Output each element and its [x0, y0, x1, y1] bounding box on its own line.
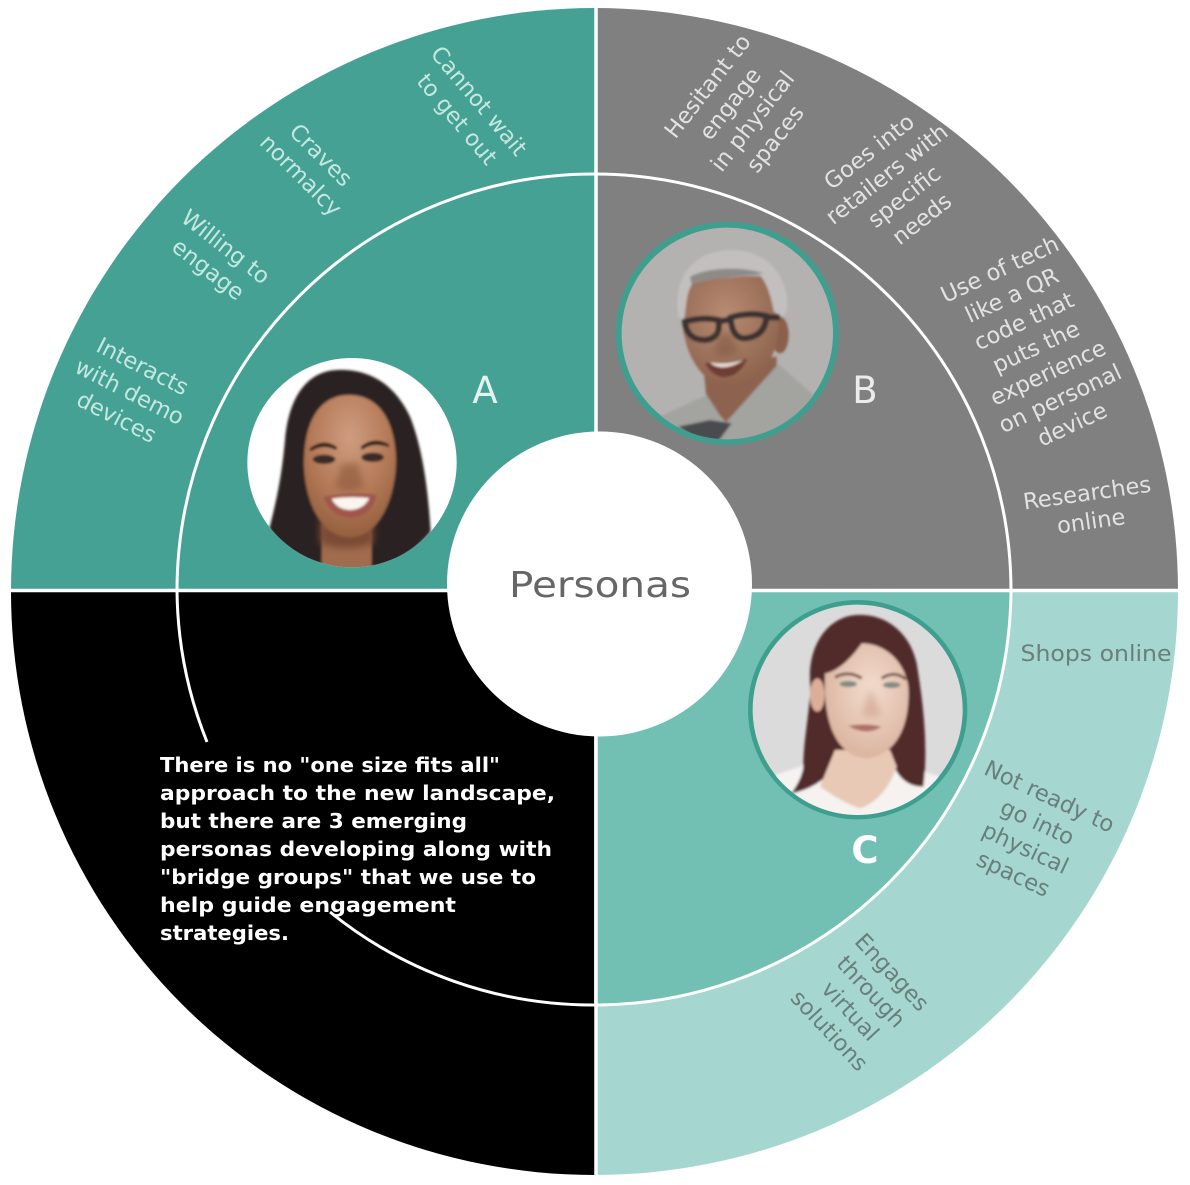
neck shadow [320, 517, 373, 548]
face [825, 643, 909, 758]
text: engages through virtual: solutions [785, 985, 873, 1077]
neck [322, 523, 372, 573]
text: use of tech: Use of tech [937, 231, 1063, 309]
shirt [774, 764, 940, 815]
neck [703, 357, 777, 423]
text: interacts with demo devices: with demo [71, 354, 188, 431]
hair [677, 250, 787, 320]
text: goes into retailers: needs [887, 188, 957, 251]
text: craves normalcy: Craves [284, 119, 357, 192]
text: researches online: online [1055, 504, 1127, 540]
mouth [705, 358, 747, 377]
portrait: persona B [619, 225, 836, 450]
brows [309, 441, 389, 451]
text: engages through virtual: through [831, 951, 910, 1033]
glasses [685, 314, 780, 340]
text: cannot wait: Cannot wait [425, 41, 532, 162]
text: goes into retailers: retailers with [821, 119, 953, 230]
hair [269, 370, 431, 570]
title: Personas: Personas [509, 565, 691, 606]
mouth [848, 724, 882, 732]
eyes [840, 681, 857, 687]
text: craves normalcy: normalcy [254, 129, 347, 222]
hair shade [690, 269, 763, 285]
text: engages through virtual: virtual [816, 976, 884, 1047]
eyes [313, 455, 335, 464]
text: researches online: Researches [1022, 472, 1153, 515]
portrait: persona A [247, 358, 457, 573]
text block: intro paragraph: personas developing along with [160, 837, 552, 861]
teeth [332, 497, 369, 510]
brows [835, 674, 906, 679]
hair [792, 615, 925, 793]
text: engages through virtual: Engages [849, 929, 934, 1017]
text: use of tech: on personal [995, 359, 1126, 439]
ear [771, 317, 789, 353]
nose shadow [862, 687, 882, 718]
text block: intro paragraph: but there are 3 emerging [160, 809, 467, 833]
label A: A [472, 369, 498, 412]
label C: C [851, 829, 879, 872]
text: hesitant to engage: in physical [706, 66, 800, 177]
text: hesitant to engage: Hesitant to [660, 30, 757, 143]
text: goes into retailers: Goes into [819, 109, 920, 195]
text: not ready: Not ready to [980, 756, 1118, 838]
text: hesitant to engage: engage [694, 63, 767, 145]
text: goes into retailers: specific [863, 161, 946, 233]
text: interacts with demo devices: devices [72, 387, 160, 449]
text: cannot wait: to get out [411, 69, 502, 171]
text block: intro paragraph: "bridge groups" that we use to [160, 865, 536, 889]
ear [810, 678, 825, 712]
text block: intro paragraph: help guide engagement [160, 893, 456, 917]
text block: intro paragraph [160, 753, 555, 945]
text: shops online: Shops online [1020, 641, 1172, 667]
text: use of tech: like a QR [961, 263, 1063, 329]
panel: segment A outer [11, 8, 594, 592]
undershirt [678, 419, 732, 439]
face [682, 274, 778, 376]
panel: black segment [11, 592, 594, 1175]
nose shadow [713, 333, 738, 356]
text block: intro paragraph: approach to the new landscape, [160, 781, 555, 805]
inner ring: A and B arcs [177, 174, 1011, 1005]
label B: B [852, 369, 878, 412]
mouth [323, 494, 377, 518]
text block: intro paragraph: There is no "one size fits all" [160, 753, 500, 777]
text: interacts with demo devices: Interacts [92, 333, 192, 401]
text: use of tech: device [1033, 398, 1111, 452]
panel: segment B outer [594, 8, 1178, 592]
text: willing to engage: engage [167, 234, 249, 306]
text: use of tech: experience [986, 335, 1110, 411]
text: willing to engage: Willing to [176, 205, 275, 290]
portrait: persona C [750, 602, 965, 830]
centre circle [447, 432, 752, 736]
shirt [660, 365, 814, 440]
teeth [710, 360, 743, 367]
nose shadow [335, 463, 364, 491]
text: use of tech: code that [970, 287, 1078, 356]
text: not ready: physical [978, 817, 1072, 880]
text: use of tech: puts the [988, 316, 1084, 379]
panel: segment C outer [594, 592, 1178, 1175]
text block: intro paragraph: strategies. [160, 921, 289, 945]
text: not ready: go into [996, 795, 1078, 851]
text: not ready: spaces [972, 846, 1054, 903]
panel: segment C inner [594, 591, 1011, 1005]
neck [820, 750, 897, 808]
text: hesitant to engage: spaces [741, 101, 810, 178]
face [304, 395, 396, 537]
